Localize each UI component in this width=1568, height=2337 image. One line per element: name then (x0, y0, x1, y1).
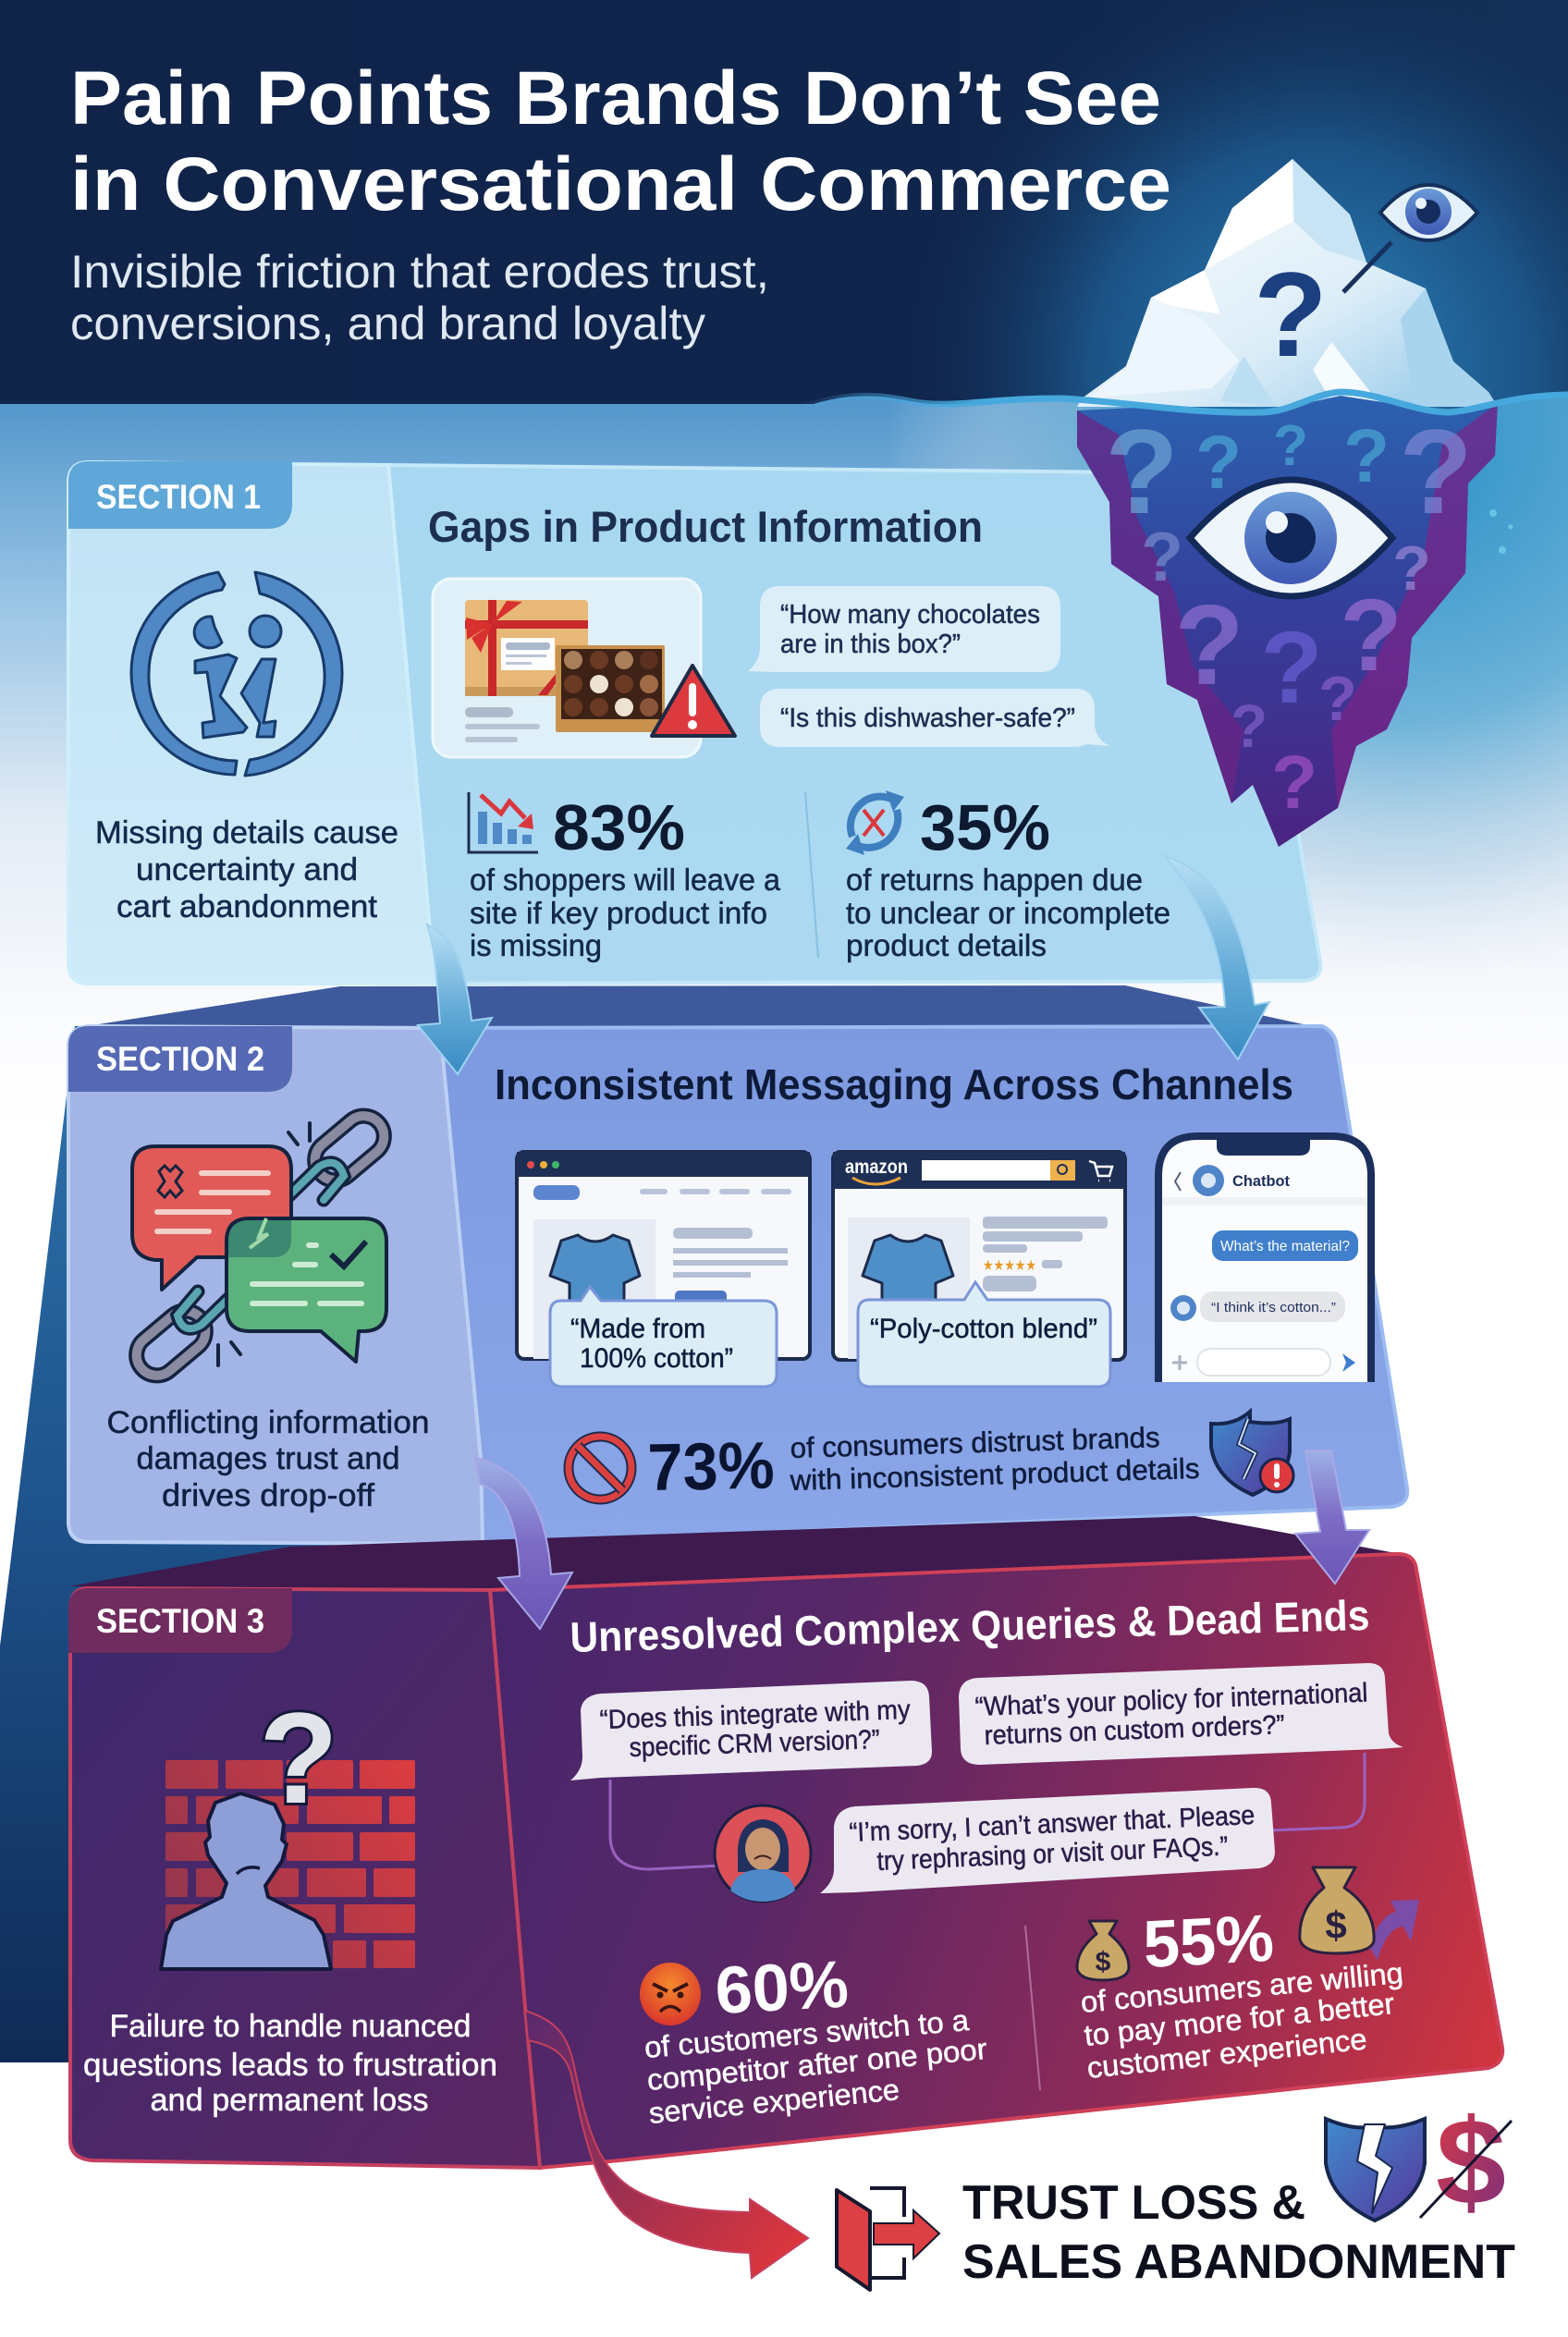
icon: small money bag: $ (1096, 1947, 1111, 1977)
stat: 55%: to pay more for a better (1083, 1987, 1396, 2052)
section 1 left panel (68, 462, 445, 984)
question mark above head: ? (259, 1685, 338, 1830)
section 3 left panel (70, 1588, 540, 2168)
callout: Made from 100% cotton: “Made from (570, 1314, 705, 1344)
section 2 description: damages trust and (137, 1441, 399, 1476)
marketplace mockup: amazon (845, 1156, 908, 1178)
section 3 heading: Unresolved Complex Queries & Dead Ends (570, 1591, 1370, 1661)
subtitle (70, 246, 769, 349)
section 2 heading: Inconsistent Messaging Across Channels (495, 1060, 1293, 1108)
icon: exit door (837, 2188, 939, 2290)
stat: 60%: competitor after one poor (645, 2032, 988, 2097)
question bubble: dishwasher: “Is this dishwasher-safe?” (780, 704, 1075, 733)
red bubble (132, 1146, 291, 1290)
question bubble: returns policy (959, 1663, 1403, 1765)
stat: 60%: of customers switch to a (643, 2003, 971, 2064)
hidden question marks: ? (1392, 533, 1431, 604)
hidden question marks (1105, 404, 1473, 825)
connector line (610, 1753, 1365, 1869)
icon: warning triangle (652, 666, 735, 736)
icon: returns cycle with X (846, 790, 904, 855)
section 2 right panel (440, 1026, 1407, 1544)
section 1 heading: Gaps in Product Information (428, 502, 983, 551)
icon: large money bag with arrow: $ (1325, 1903, 1347, 1947)
dark left backdrop block (0, 1026, 647, 2062)
hidden question marks: ? (1105, 404, 1179, 539)
header band (0, 0, 1568, 412)
question bubble: chocolates: are in this box?” (780, 630, 961, 659)
title: in Conversational Commerce (70, 142, 1171, 226)
stat: 73%: with inconsistent product details (789, 1452, 1200, 1497)
small eye with pointer (1343, 185, 1477, 292)
iceberg question mark: ? (1254, 247, 1328, 382)
callout: Made from 100% cotton: 100% cotton” (580, 1343, 733, 1374)
section 1 description (95, 815, 398, 924)
green bubble (227, 1218, 386, 1362)
hidden question marks: ? (1141, 518, 1183, 595)
section 1 tab: SECTION 1 (96, 478, 261, 516)
brick wall (165, 1760, 415, 1968)
top broken chain (285, 1107, 392, 1200)
panel: section 2 (68, 985, 1407, 1544)
stat: 73%: 73% (647, 1429, 775, 1505)
marketplace mockup: ★★★★★ (983, 1256, 1036, 1274)
stat: 83%: is missing (470, 928, 602, 962)
callout: Poly-cotton blend (858, 1282, 1110, 1387)
panel: section 1 (68, 461, 1320, 984)
icon: broken shield with alert (1211, 1412, 1293, 1495)
brand website mockup (517, 1152, 810, 1359)
section 1 description: uncertainty and (136, 852, 358, 887)
stat: 35%: product details (846, 928, 1047, 962)
icon: angry face (640, 1963, 701, 2025)
stat: 55% (1077, 1867, 1419, 2085)
large eye (1190, 480, 1392, 596)
section 3 description: and permanent loss (150, 2083, 429, 2118)
chatbot phone mockup: Chatbot (1232, 1172, 1290, 1190)
section 3 tab (68, 1588, 292, 1653)
section 3 tab: SECTION 3 (96, 1602, 264, 1640)
section 1 tab (68, 461, 292, 529)
stat: 73%: of consumers distrust brands (790, 1421, 1160, 1464)
icon: broken shield (1326, 2119, 1425, 2221)
support agent avatar (715, 1805, 811, 1902)
stat: 83%: site if key product info (470, 896, 767, 930)
arrow: section 1 left to section 2 (418, 924, 492, 1074)
section 2 tab (68, 1026, 292, 1092)
question bubble: CRM: “Does this integrate with my (599, 1695, 912, 1735)
question bubble: dishwasher (760, 689, 1109, 747)
outcome: trust loss and sales abandonment: TRUST LOSS & (962, 2176, 1305, 2230)
section 2 description: drives drop-off (162, 1478, 375, 1513)
panel: section 3 (68, 1516, 1502, 2168)
outcome: trust loss and sales abandonment: SALES ABANDONMENT (962, 2235, 1515, 2289)
stat: 83%: 83% (553, 791, 685, 863)
question bubble: chocolates: “How many chocolates (780, 600, 1040, 630)
hidden question marks: ? (1318, 664, 1357, 734)
section 3 right panel (490, 1554, 1502, 2168)
stat: 55%: 55% (1142, 1902, 1276, 1982)
section 1 description: cart abandonment (116, 889, 378, 924)
icon: prohibition sign (569, 1437, 631, 1499)
callout: Made from 100% cotton (550, 1287, 777, 1387)
stat: 60%: 60% (714, 1948, 851, 2028)
stat: 60%: service experience (647, 2073, 900, 2130)
section 3 description: Failure to handle nuanced (109, 2009, 472, 2044)
stat: 83% (469, 791, 781, 962)
subtitle: conversions, and brand loyalty (70, 298, 705, 349)
section 2 left panel (68, 1026, 483, 1544)
product card with gift box and chocolates (433, 579, 735, 757)
chatbot reply bubble: try rephrasing or visit our FAQs.” (876, 1831, 1229, 1877)
hidden question marks: ? (1399, 404, 1473, 539)
stat: 35% (846, 790, 1170, 962)
stat: 55%: of consumers are willing (1079, 1956, 1404, 2019)
stat: 35%: 35% (920, 791, 1050, 863)
chatbot reply bubble: “I’m sorry, I can’t answer that. Please (849, 1801, 1256, 1848)
stat: 55%: customer experience (1085, 2022, 1368, 2085)
title: Pain Points Brands Don’t See (70, 56, 1161, 141)
icon: person facing brick wall (161, 1685, 415, 1969)
stat: 83%: of shoppers will leave a (470, 863, 781, 897)
icon: conflicting chat bubbles with broken chain (129, 1107, 392, 1384)
question bubble: chocolates (748, 586, 1060, 672)
section 3 rear ledge (69, 1516, 1401, 1592)
section 3 description (83, 2009, 497, 2118)
arrow: section 2 right to section 3 (1295, 1450, 1369, 1584)
chatbot reply bubble (820, 1788, 1275, 1893)
stat: 60% (640, 1948, 988, 2130)
icon: large money bag with arrow (1300, 1867, 1419, 1960)
section 1 right panel (388, 465, 1320, 984)
icon: falling bar chart (469, 792, 538, 852)
arrow: section 1 right to section 2 (1165, 856, 1269, 1059)
section 2 description: Conflicting information (107, 1405, 429, 1440)
subtitle: Invisible friction that erodes trust, (70, 246, 769, 298)
section 2 description (107, 1405, 429, 1513)
section 1 description: Missing details cause (95, 815, 398, 850)
arrow: section 2 left to section 3 (475, 1457, 572, 1629)
person silhouette (161, 1793, 331, 1969)
icon: crossed-out dollar sign: $ (1436, 2094, 1506, 2230)
question bubble: CRM: specific CRM version?” (629, 1725, 880, 1763)
chatbot phone mockup: What’s the material? (1220, 1239, 1350, 1254)
iceberg illustration (795, 159, 1568, 847)
question bubble: returns policy: returns on custom orders?” (984, 1710, 1285, 1751)
stat: 35%: to unclear or incomplete (846, 896, 1170, 930)
arrow: section 3 to outcome (525, 2011, 808, 2278)
bottom broken chain (129, 1291, 240, 1384)
callout: Poly-cotton blend: “Poly-cotton blend” (870, 1314, 1097, 1344)
hidden question marks: ? (1343, 414, 1390, 498)
chatbot phone mockup (1158, 1136, 1371, 1382)
icon: small money bag (1077, 1921, 1129, 1980)
marketplace mockup (833, 1152, 1125, 1360)
section 2 tab: SECTION 2 (96, 1040, 264, 1078)
waterline (795, 392, 1568, 412)
section 2 rear ledge (75, 985, 1320, 1028)
hidden question marks: ? (1340, 579, 1403, 692)
stat: 35%: of returns happen due (846, 863, 1143, 897)
hidden question marks: ? (1195, 421, 1242, 505)
question bubble: returns policy: “What’s your policy for international (974, 1678, 1368, 1722)
hidden question marks: ? (1260, 611, 1323, 725)
section 3 description: questions leads to frustration (83, 2048, 497, 2083)
chatbot phone mockup: “I think it’s cotton...” (1211, 1300, 1336, 1315)
icon: broken info circle (131, 572, 342, 776)
question bubble: CRM (570, 1681, 932, 1780)
outcome: trust loss and sales abandonment (837, 2094, 1515, 2290)
iceberg above water (1077, 159, 1498, 407)
stat: 73% (569, 1412, 1293, 1505)
iceberg below water (1077, 396, 1498, 847)
hidden question marks: ? (1273, 414, 1308, 478)
hidden question marks: ? (1231, 691, 1268, 760)
hidden question marks: ? (1271, 740, 1317, 825)
hidden question marks: ? (1174, 582, 1244, 709)
title (70, 56, 1171, 226)
